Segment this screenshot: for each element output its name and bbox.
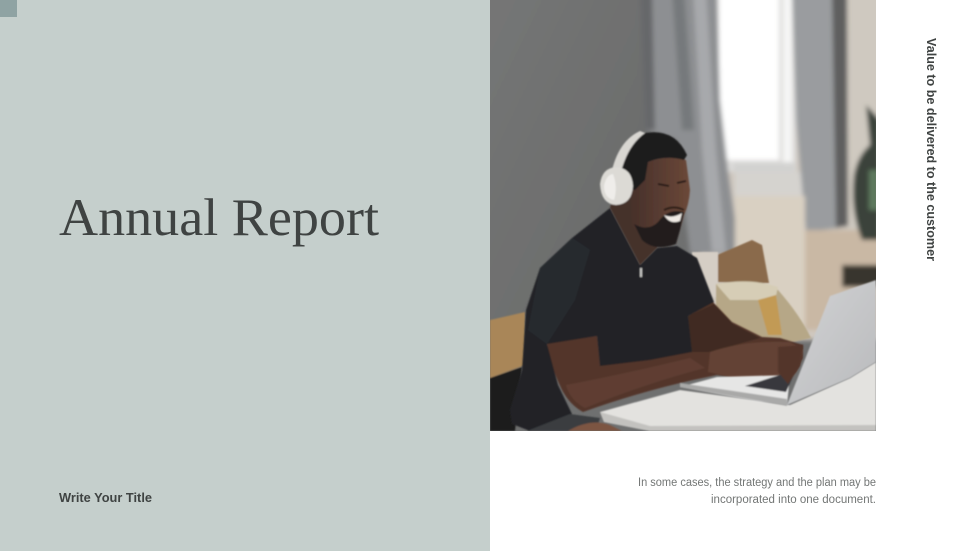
- panel: left title background: [0, 0, 490, 551]
- photo: white table: [600, 362, 876, 431]
- vertical side caption: Value to be delivered to the customer: [924, 38, 939, 261]
- photo: wooden chair and stump in background: [490, 240, 811, 431]
- corner accent square: [0, 0, 17, 17]
- photo: man's torso and arms: [510, 208, 803, 431]
- body text: incorporated into one document.: [711, 494, 876, 506]
- photo background: room wall, window and curtains: [644, 0, 876, 343]
- photo: silver laptop: [680, 280, 876, 406]
- body text: [638, 477, 876, 506]
- photo: man with headphones working on laptop: [480, 0, 890, 431]
- body text: In some cases, the strategy and the plan may be: [638, 477, 876, 489]
- photo: man's head with headphones: [600, 131, 690, 265]
- subtitle: Write Your Title: [59, 490, 152, 505]
- title: Annual Report: [59, 189, 379, 247]
